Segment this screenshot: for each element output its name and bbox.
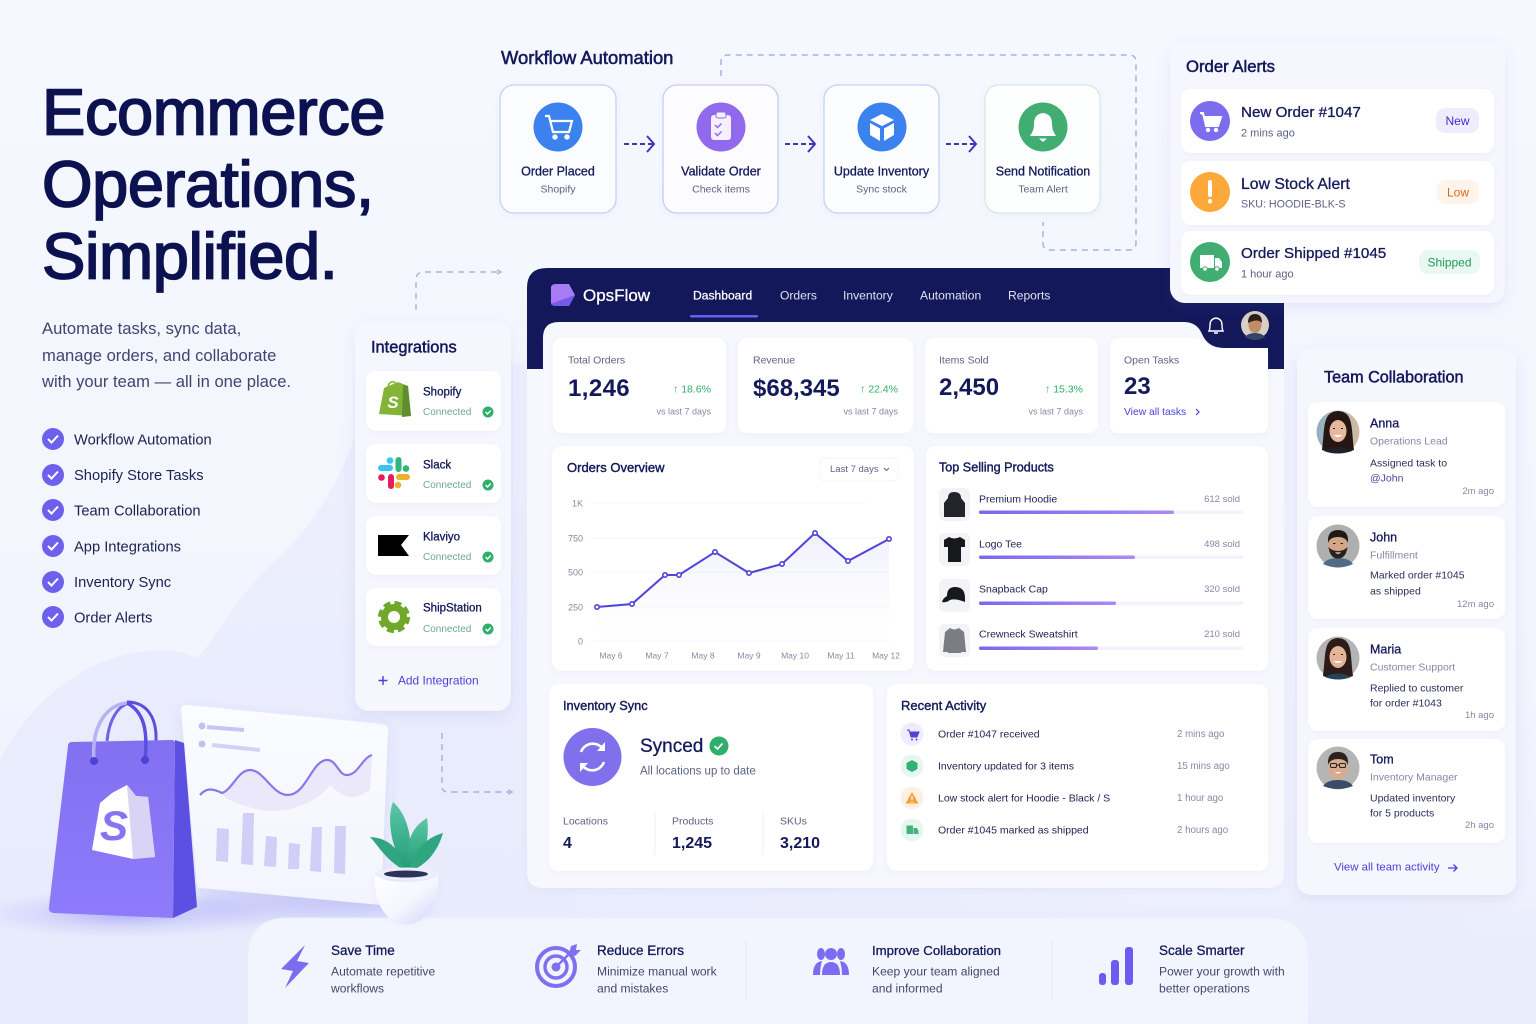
panel: top selling products: Top Selling Products [939,461,1054,475]
connector: bottom-left dashed arrow [442,733,512,794]
integration: slack: Slack [423,460,451,472]
member: anna [1308,402,1505,507]
member: tom: Inventory Manager [1370,772,1458,784]
heading: workflow automation: Workflow Automation [501,47,673,68]
badge: shipped: Shipped [1427,256,1472,270]
workflow step: validate order [663,85,778,213]
avatar: tom [1316,746,1360,790]
member: tom: Updated inventory [1370,793,1456,805]
arrow: step 1 to 2 [624,136,654,152]
metric: revenue: $68,345 [753,375,840,402]
metric: open tasks: 23 [1124,373,1151,400]
metric: open tasks: Open Tasks [1124,355,1179,367]
metric: total orders: 1,246 [568,375,630,402]
activity: inventory updated: 15 mins ago [1177,761,1230,772]
integration: klaviyo [366,516,501,575]
panel: order alerts [1170,42,1505,303]
metric: revenue: ↑ 22.4% [860,384,898,396]
product: premium hoodie: Premium Hoodie [979,494,1057,506]
item: app integrations [42,535,181,557]
line chart: May 11 [827,651,855,661]
stat: locations: 4 [563,835,572,852]
icon: klaviyo flag [378,535,409,556]
member: maria: Replied to customer [1370,683,1464,695]
title: Simplified. [42,220,337,292]
metric: open tasks [1110,338,1268,433]
product: crewneck sweatshirt: 210 sold [1204,629,1240,640]
member: john: Fulfillment [1370,550,1418,562]
navigation: Automation [920,289,981,303]
workflow step: send notification: Team Alert [1018,184,1068,196]
panel: ops dashboard [527,268,1284,888]
integration: slack: Connected [423,480,471,491]
intro paragraph: manage orders, and collaborate [42,346,276,365]
alert: low stock [1181,161,1494,225]
product: snapback cap [939,579,1243,612]
panel: team collaboration: Team Collaboration [1324,369,1463,387]
item: workflow automation [42,428,212,450]
member: anna: Anna [1370,417,1399,431]
item: shopify store tasks [42,464,204,486]
illustration: shopping bag, chart board and plant [49,702,443,924]
title: Ecommerce [42,76,385,148]
benefit: reduce errors [537,943,718,996]
member: john: as shipped [1370,586,1421,598]
line chart: May 12 [872,651,900,661]
activity: order shipped: 2 hours ago [1177,825,1228,836]
metric: items sold: ↑ 15.3% [1045,384,1083,396]
alert: new order: New Order #1047 [1241,104,1361,121]
member: maria: Customer Support [1370,662,1455,674]
navigation: Orders [780,289,817,303]
stat: skus: 3,210 [780,835,820,852]
navigation: Dashboard [693,289,752,303]
logo: opsflow [551,284,651,306]
integration: shipstation: ShipStation [423,603,482,615]
benefit: save time: Automate repetitive [331,965,435,979]
icon: box [870,114,894,141]
member: john [1308,516,1505,619]
metric: items sold: vs last 7 days [1028,407,1083,417]
alert: order shipped: Order Shipped #1045 [1241,245,1386,262]
activity: inventory updated [900,754,1230,778]
icon: cart [545,116,572,139]
item: app integrations: App Integrations [74,540,181,556]
line chart: 500 [568,568,583,578]
avatar: john [1316,524,1360,568]
arrow: step 3 to 4 [946,136,976,152]
badge: new [1436,108,1479,133]
product: snapback cap: Snapback Cap [979,584,1048,596]
benefit: reduce errors: Minimize manual work [597,965,718,979]
title: Operations, [42,148,374,220]
benefit: improve collaboration: Improve Collaboration [872,943,1001,958]
product: premium hoodie: 612 sold [1204,494,1240,505]
metric: items sold: 2,450 [939,374,999,401]
stat: locations: Locations [563,816,608,828]
navigation [690,289,1050,318]
intro paragraph [41,319,291,391]
integration: slack [366,444,501,503]
dashboard background [527,268,1284,888]
workflow step: order placed: Order Placed [521,165,595,179]
stat: products: 1,245 [672,835,712,852]
panel: inventory sync [549,684,873,871]
activity: low stock alert: Low stock alert for Hoodie - Black / S [938,793,1110,805]
panel: recent activity: Recent Activity [901,698,987,713]
product: logo tee: Logo Tee [979,539,1022,551]
metric: revenue: vs last 7 days [843,407,898,417]
line chart: 750 [568,534,583,544]
line chart: May 6 [599,651,623,661]
item: inventory sync [42,571,171,593]
panel: inventory sync: All locations up to date [640,766,756,778]
benefit: improve collaboration: Keep your team aligned [872,965,1000,979]
line chart: May 8 [691,651,715,661]
panel: order alerts: Order Alerts [1186,57,1275,76]
workflow step: validate order: Check items [692,184,750,196]
item: workflow automation: Workflow Automation [74,433,212,449]
benefit: improve collaboration: and informed [872,982,943,996]
member: anna: 2m ago [1462,486,1494,497]
intro paragraph: Automate tasks, sync data, [42,319,241,338]
line chart: 0 [578,637,583,647]
feature checklist [42,428,212,628]
icon: clipboard [711,112,731,140]
member: tom: 2h ago [1465,820,1494,831]
badge: low: Low [1447,186,1469,200]
workflow step: order placed: Shopify [540,184,576,196]
icon: slack logo [378,457,410,489]
panel: recent activity [887,684,1268,871]
activity: order shipped: Order #1045 marked as shipped [938,825,1089,837]
logo: opsflow: OpsFlow [583,286,651,305]
member: maria: for order #1043 [1370,698,1442,710]
integration: klaviyo: Klaviyo [423,532,460,544]
line chart: May 10 [781,651,809,661]
dropdown: last 7 days [820,458,898,481]
member: maria: Maria [1370,643,1401,657]
benefit: scale smarter [1099,943,1285,996]
icon: shopify logo on bag [92,785,155,859]
benefit: save time: workflows [330,982,384,996]
integration: klaviyo: Connected [423,552,471,563]
workflow step: update inventory: Update Inventory [834,165,930,179]
panel: top selling products [926,446,1268,671]
icon: gear [381,604,407,630]
arrow: step 2 to 3 [785,136,815,152]
item: shopify store tasks: Shopify Store Tasks [74,468,204,484]
alert: order shipped: 1 hour ago [1241,269,1294,281]
activity: low stock alert [900,786,1223,810]
alert: new order: 2 mins ago [1241,128,1295,140]
integration: shopify: Connected [423,407,471,418]
benefit: save time: Save Time [331,943,395,958]
stat: skus: SKUs [780,816,807,828]
integration: shopify: Shopify [423,387,462,399]
icon: bars [1099,947,1133,985]
metric: revenue [738,338,913,433]
line chart: May 7 [645,651,669,661]
badge: new: New [1445,114,1470,128]
line chart: 250 [568,603,583,613]
benefit: scale smarter: Power your growth with [1159,965,1285,979]
connector: top-left dashed arrow [416,270,501,310]
workflow step: order placed [500,85,616,213]
alert: order shipped [1181,231,1494,295]
title [42,76,385,292]
product: crewneck sweatshirt: Crewneck Sweatshirt [979,629,1078,641]
alert: low stock: Low Stock Alert [1241,176,1350,193]
product: crewneck sweatshirt [939,624,1243,657]
navigation: Inventory [843,289,894,303]
activity: low stock alert: 1 hour ago [1177,793,1223,804]
integration: shipstation: Connected [423,624,471,635]
chart board [181,705,388,905]
intro paragraph: with your team — all in one place. [41,372,291,391]
workflow step: send notification [985,85,1100,213]
activity: order received [900,722,1224,746]
workflow step: validate order: Validate Order [681,165,761,179]
panel: integrations: Integrations [371,339,457,357]
member: maria [1308,628,1505,731]
icon: bell [1030,113,1056,142]
product: snapback cap: 320 sold [1204,584,1240,595]
avatar: user [1241,311,1269,340]
benefit: reduce errors: and mistakes [597,982,668,996]
metric: items sold: Items Sold [939,355,989,367]
potted plant [370,802,443,924]
stat: locations [563,816,608,852]
activity: order shipped [900,818,1228,842]
member: anna: @John [1370,473,1404,485]
panel: team collaboration [1297,349,1516,895]
item: order alerts [42,606,152,628]
icon: sync circle [564,728,622,786]
product: premium hoodie [939,488,1243,521]
member: maria: 1h ago [1465,710,1494,721]
benefit: reduce errors: Reduce Errors [597,943,684,958]
workflow step: update inventory: Sync stock [856,184,908,196]
item: inventory sync: Inventory Sync [74,575,171,591]
benefit: save time [281,943,435,996]
navigation: Reports [1008,289,1050,303]
dropdown: last 7 days: Last 7 days [830,464,879,475]
stat: products: Products [672,816,713,828]
member: john: 12m ago [1457,599,1494,610]
bottom benefits bar [248,918,1308,1024]
product: logo tee: 498 sold [1204,539,1240,550]
shopping bag [49,702,197,918]
benefit: scale smarter: better operations [1159,982,1250,996]
icon: lightning bolt [281,945,309,988]
product: logo tee [939,533,1243,566]
integration: shopify [366,371,501,431]
avatar: maria [1316,636,1360,680]
item: team collaboration: Team Collaboration [74,504,201,520]
link: view all team activity: View all team activity [1334,862,1440,874]
metric: total orders: Total Orders [568,355,625,367]
line chart: May 9 [737,651,761,661]
member: john: Marked order #1045 [1370,570,1465,582]
alert: new order [1181,89,1494,153]
metric: total orders: vs last 7 days [656,407,711,417]
badge: shipped [1419,250,1480,274]
panel: orders overview [552,446,914,671]
benefit: improve collaboration [813,943,1001,996]
panel: inventory sync: Synced [640,736,703,757]
line chart [568,499,900,661]
member: tom: for 5 products [1370,808,1434,820]
icon: shopify bag: S [387,393,399,412]
member: tom [1308,739,1505,843]
stat: products [672,816,713,852]
avatar: anna [1316,410,1360,454]
panel: orders overview: Orders Overview [567,460,665,475]
metric: total orders: ↑ 18.6% [673,384,711,396]
metric: revenue: Revenue [753,355,795,367]
activity: order received: 2 mins ago [1177,729,1224,740]
workflow step: send notification: Send Notification [996,165,1090,179]
icon: people [813,948,849,975]
activity: order received: Order #1047 received [938,729,1040,741]
member: anna: Assigned task to [1370,458,1447,470]
metric: total orders [553,338,726,433]
member: john: John [1370,531,1397,545]
panel: integrations [355,322,511,711]
benefit: scale smarter: Scale Smarter [1159,943,1245,958]
line chart: 1K [572,499,583,509]
member: tom: Tom [1370,753,1394,767]
metric: open tasks: View all tasks [1124,407,1186,418]
activity: inventory updated: Inventory updated for 3 items [938,761,1074,773]
item: order alerts: Order Alerts [74,611,152,627]
item: team collaboration [42,499,201,521]
icon: target [537,944,581,986]
stat: skus [780,816,820,852]
integration: shipstation [366,588,501,646]
workflow step: update inventory [824,85,939,213]
metric: items sold [925,338,1098,433]
add integration link: Add Integration [398,674,479,688]
alert: low stock: SKU: HOODIE-BLK-S [1241,199,1346,211]
icon: notification bell [1209,318,1223,333]
badge: low [1437,180,1479,204]
icon: shopify logo on bag: S [100,802,128,849]
connector: workflow loop dashed line [721,55,1136,250]
member: anna: Operations Lead [1370,436,1448,448]
panel: inventory sync: Inventory Sync [563,698,648,713]
